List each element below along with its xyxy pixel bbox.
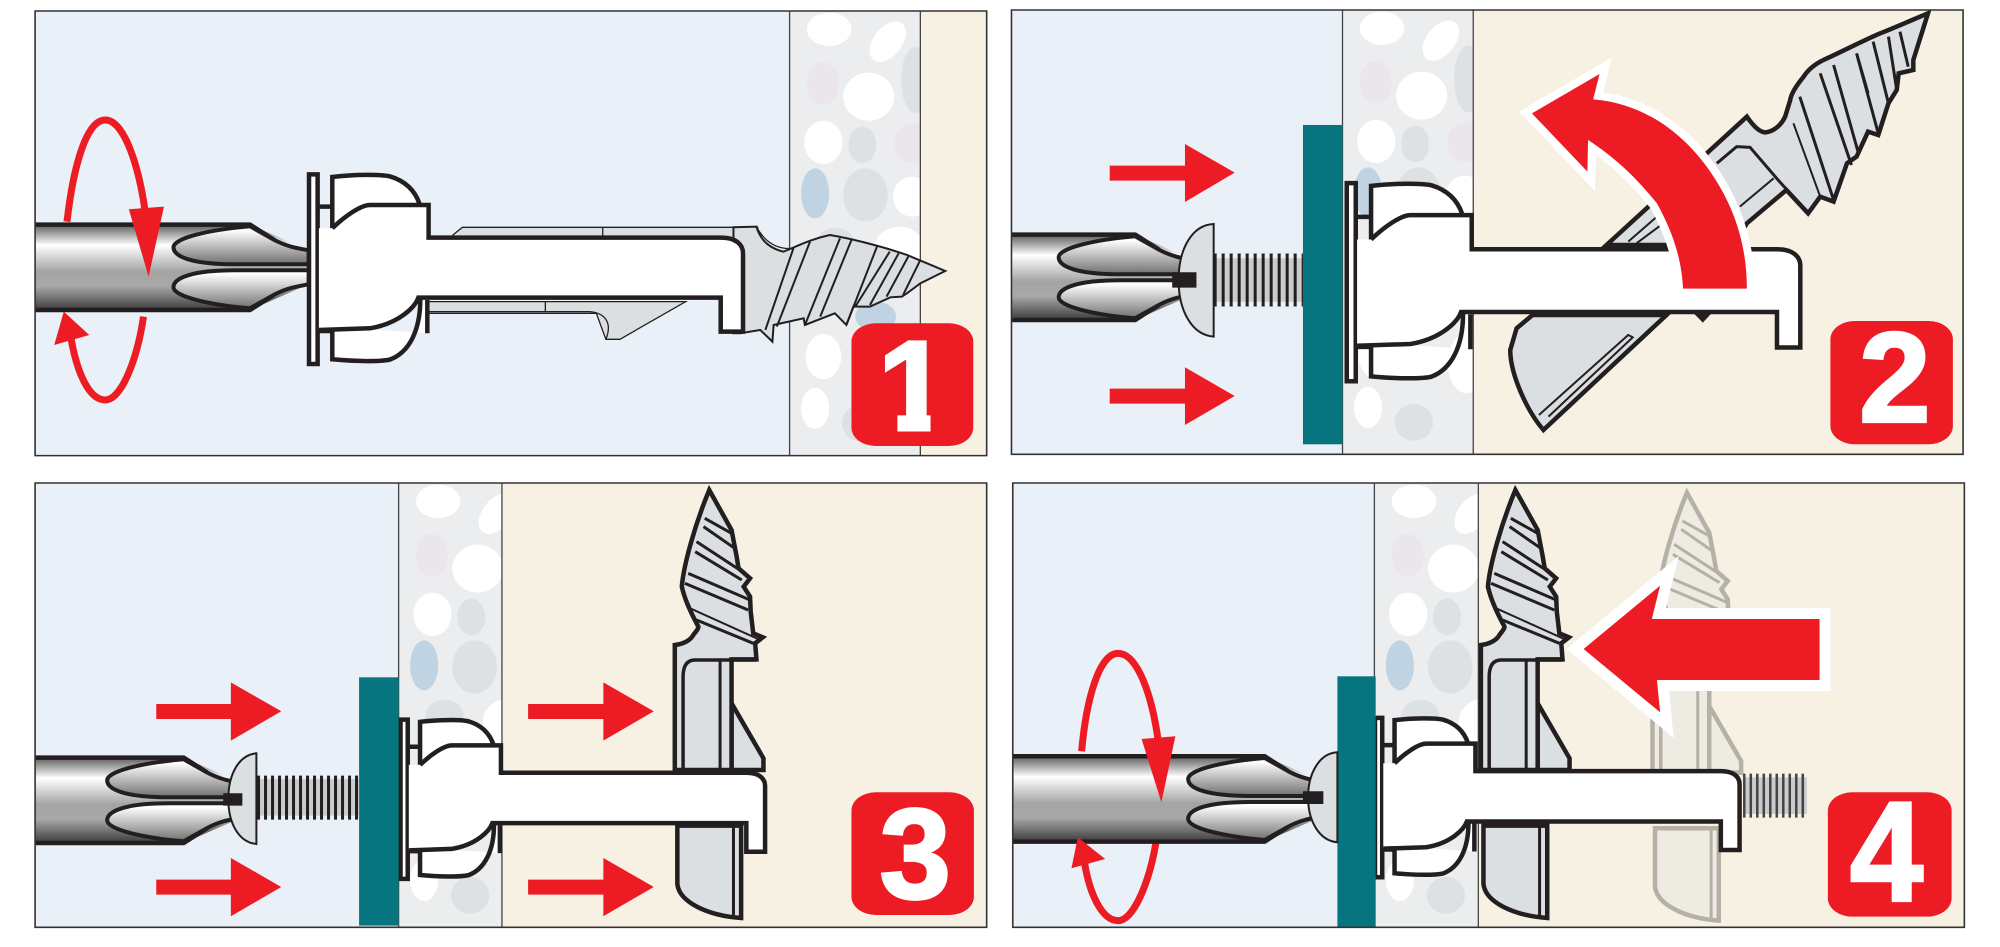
panel 4 wall edges xyxy=(1374,483,1478,927)
panel 3 white fixing body xyxy=(401,720,765,879)
panel: step 4 xyxy=(1012,482,1966,928)
panel 2 swinging fixing and screw xyxy=(1510,13,1928,430)
panel 2 number badge: 2 xyxy=(1859,307,1930,450)
panel 4 screwdriver xyxy=(1014,754,1312,844)
panel 3 screwdriver xyxy=(36,755,231,846)
panel 4 teal panel xyxy=(1337,676,1376,927)
panel 1 rotation arrow xyxy=(54,120,164,345)
panel: step 1 xyxy=(0,11,987,458)
panel 3 bolt head xyxy=(223,753,256,844)
panel 4 red pull arrow xyxy=(1584,586,1820,712)
panel 2 bolt head xyxy=(1172,224,1214,337)
panel 1 room background xyxy=(35,11,790,456)
panel 2 red curved arrow xyxy=(1532,74,1747,289)
panel 4 number badge: 4 xyxy=(1850,772,1923,931)
panel 1 grey fixing and drill tip xyxy=(429,227,945,342)
panel 3 push arrows right xyxy=(528,682,654,916)
panel 1 number badge xyxy=(851,315,973,458)
panel 2 screwdriver xyxy=(1012,232,1181,322)
panel 2 room background xyxy=(1011,10,1342,454)
panel 4 grey fixing vertical xyxy=(1481,490,1570,918)
panel 1 white fixing body xyxy=(309,174,743,364)
panel 4 frame xyxy=(1013,483,1964,927)
panel 3 plasterboard wall xyxy=(399,483,542,930)
panel 4 cavity xyxy=(1478,483,1964,927)
panel 1 cavity xyxy=(920,11,987,456)
panel 4 bolt thread end xyxy=(1743,777,1807,814)
panel 3 cavity xyxy=(502,483,987,927)
panel 2 frame xyxy=(1011,10,1963,454)
panel 1 number badge: 1 xyxy=(878,315,949,458)
panel 2 wall edges xyxy=(1342,10,1473,454)
panel 1 screwdriver xyxy=(0,225,309,310)
panel 1 frame xyxy=(35,11,987,456)
panel 4 bolt head xyxy=(1303,752,1337,842)
panel 1 plasterboard wall xyxy=(790,11,933,458)
panel 4 rotation arrow xyxy=(1071,653,1175,868)
panel 4 ghost fixing xyxy=(1652,493,1741,921)
panel 3 wall edges xyxy=(399,483,502,927)
panel 4 lower rotation arc behind driver xyxy=(1084,841,1156,921)
panel 3 number badge: 3 xyxy=(880,783,951,926)
panel 2 number badge xyxy=(1830,307,1953,450)
panel 3 frame xyxy=(35,483,987,927)
panel 1 lower rotation arc behind driver xyxy=(70,317,144,400)
panel 2 plasterboard wall xyxy=(1342,10,1486,457)
panel 1 wall edges xyxy=(790,11,920,456)
panel 3 number badge xyxy=(851,783,974,926)
panel: step 3 xyxy=(0,483,987,930)
panel 4 number badge xyxy=(1828,772,1952,931)
panel: step 2 xyxy=(1010,9,1964,456)
panel 3 grey fixing vertical xyxy=(675,490,763,918)
panel 3 room background xyxy=(35,483,399,927)
panel 3 teal panel xyxy=(359,677,399,926)
panel 2 cavity xyxy=(1473,10,1963,454)
panel 4 room background xyxy=(1013,483,1374,927)
panel 3 bolt thread xyxy=(257,779,359,816)
panel 3 push arrows left xyxy=(156,682,281,916)
panel 2 push arrow bottom xyxy=(1110,367,1235,425)
panel 2 teal panel xyxy=(1303,125,1342,444)
panel 2 bolt thread xyxy=(1214,258,1303,302)
panel 4 white fixing body xyxy=(1375,718,1740,877)
panel 2 white fixing body xyxy=(1347,183,1800,381)
panel 4 plasterboard wall xyxy=(1374,483,1518,930)
panel 2 push arrow top xyxy=(1110,144,1235,202)
